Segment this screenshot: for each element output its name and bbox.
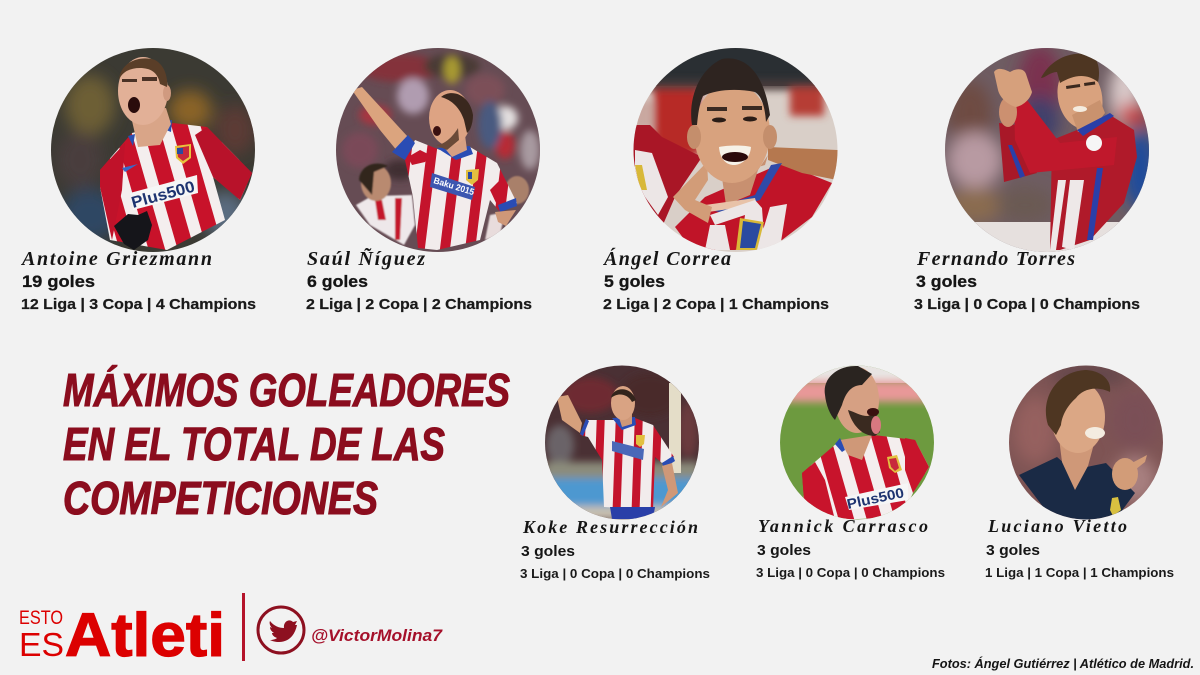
name: Luciano Vietto (987, 516, 1127, 536)
breakdown: 2 Liga | 2 Copa | 1 Champions (603, 296, 829, 313)
goals: 6 goles (307, 272, 368, 291)
sponsor: Plus500: Plus500 (845, 484, 906, 512)
photo: Correa (633, 48, 838, 252)
panel: Luciano Vietto (985, 365, 1174, 580)
photo: Griezmann (51, 48, 255, 252)
name: Antoine Griezmann (20, 248, 212, 270)
panel: Antoine Griezmann (20, 48, 256, 313)
breakdown: 3 Liga | 0 Copa | 0 Champions (914, 296, 1140, 313)
photo: Torres (945, 45, 1156, 252)
breakdown: 3 Liga | 0 Copa | 0 Champions (756, 565, 945, 580)
name: Saúl Ñíguez (307, 247, 425, 270)
title: COMPETICIONES (63, 472, 378, 524)
goals: 5 goles (604, 272, 665, 291)
name: Koke Resurrección (522, 517, 698, 537)
name: Ángel Correa (602, 247, 731, 270)
panel: Saúl Ñíguez (306, 48, 540, 313)
sponsor: Baku 2015: Baku 2015 (432, 175, 476, 197)
panel: Ángel Correa (602, 48, 838, 313)
breakdown: 12 Liga | 3 Copa | 4 Champions (21, 296, 256, 313)
goals: 3 goles (757, 542, 811, 559)
panel: Koke Resurrección (520, 365, 710, 581)
divider (242, 593, 245, 661)
panel: Fernando Torres (914, 45, 1156, 313)
title: MÁXIMOS GOLEADORES (63, 364, 510, 416)
breakdown: 3 Liga | 0 Copa | 0 Champions (520, 566, 710, 581)
logo: Esto es Atleti: ES (19, 626, 64, 663)
goals: 3 goles (521, 543, 575, 560)
logo: Esto es Atleti: ESTO (19, 608, 63, 629)
photo: Koke (545, 365, 699, 520)
title: EN EL TOTAL DE LAS (63, 418, 445, 470)
name: Fernando Torres (916, 248, 1075, 270)
photo: Vietto (1009, 365, 1163, 520)
goals: 19 goles (22, 272, 95, 291)
name: Yannick Carrasco (758, 516, 928, 536)
photo: Carrasco (780, 365, 934, 520)
photo credit: Fotos: Ángel Gutiérrez | Atlético de Madrid. (932, 656, 1194, 671)
panel: Yannick Carrasco (756, 365, 945, 580)
title (63, 364, 510, 524)
breakdown: 2 Liga | 2 Copa | 2 Champions (306, 296, 532, 313)
icon: twitter (258, 607, 304, 653)
photo: Saúl (336, 48, 540, 252)
logo: Esto es Atleti: Atleti (65, 601, 225, 669)
sponsor: Plus500: Plus500 (130, 179, 197, 212)
goals: 3 goles (986, 542, 1040, 559)
twitter handle: @VictorMolina7 (311, 626, 444, 645)
breakdown: 1 Liga | 1 Copa | 1 Champions (985, 565, 1174, 580)
goals: 3 goles (916, 272, 977, 291)
